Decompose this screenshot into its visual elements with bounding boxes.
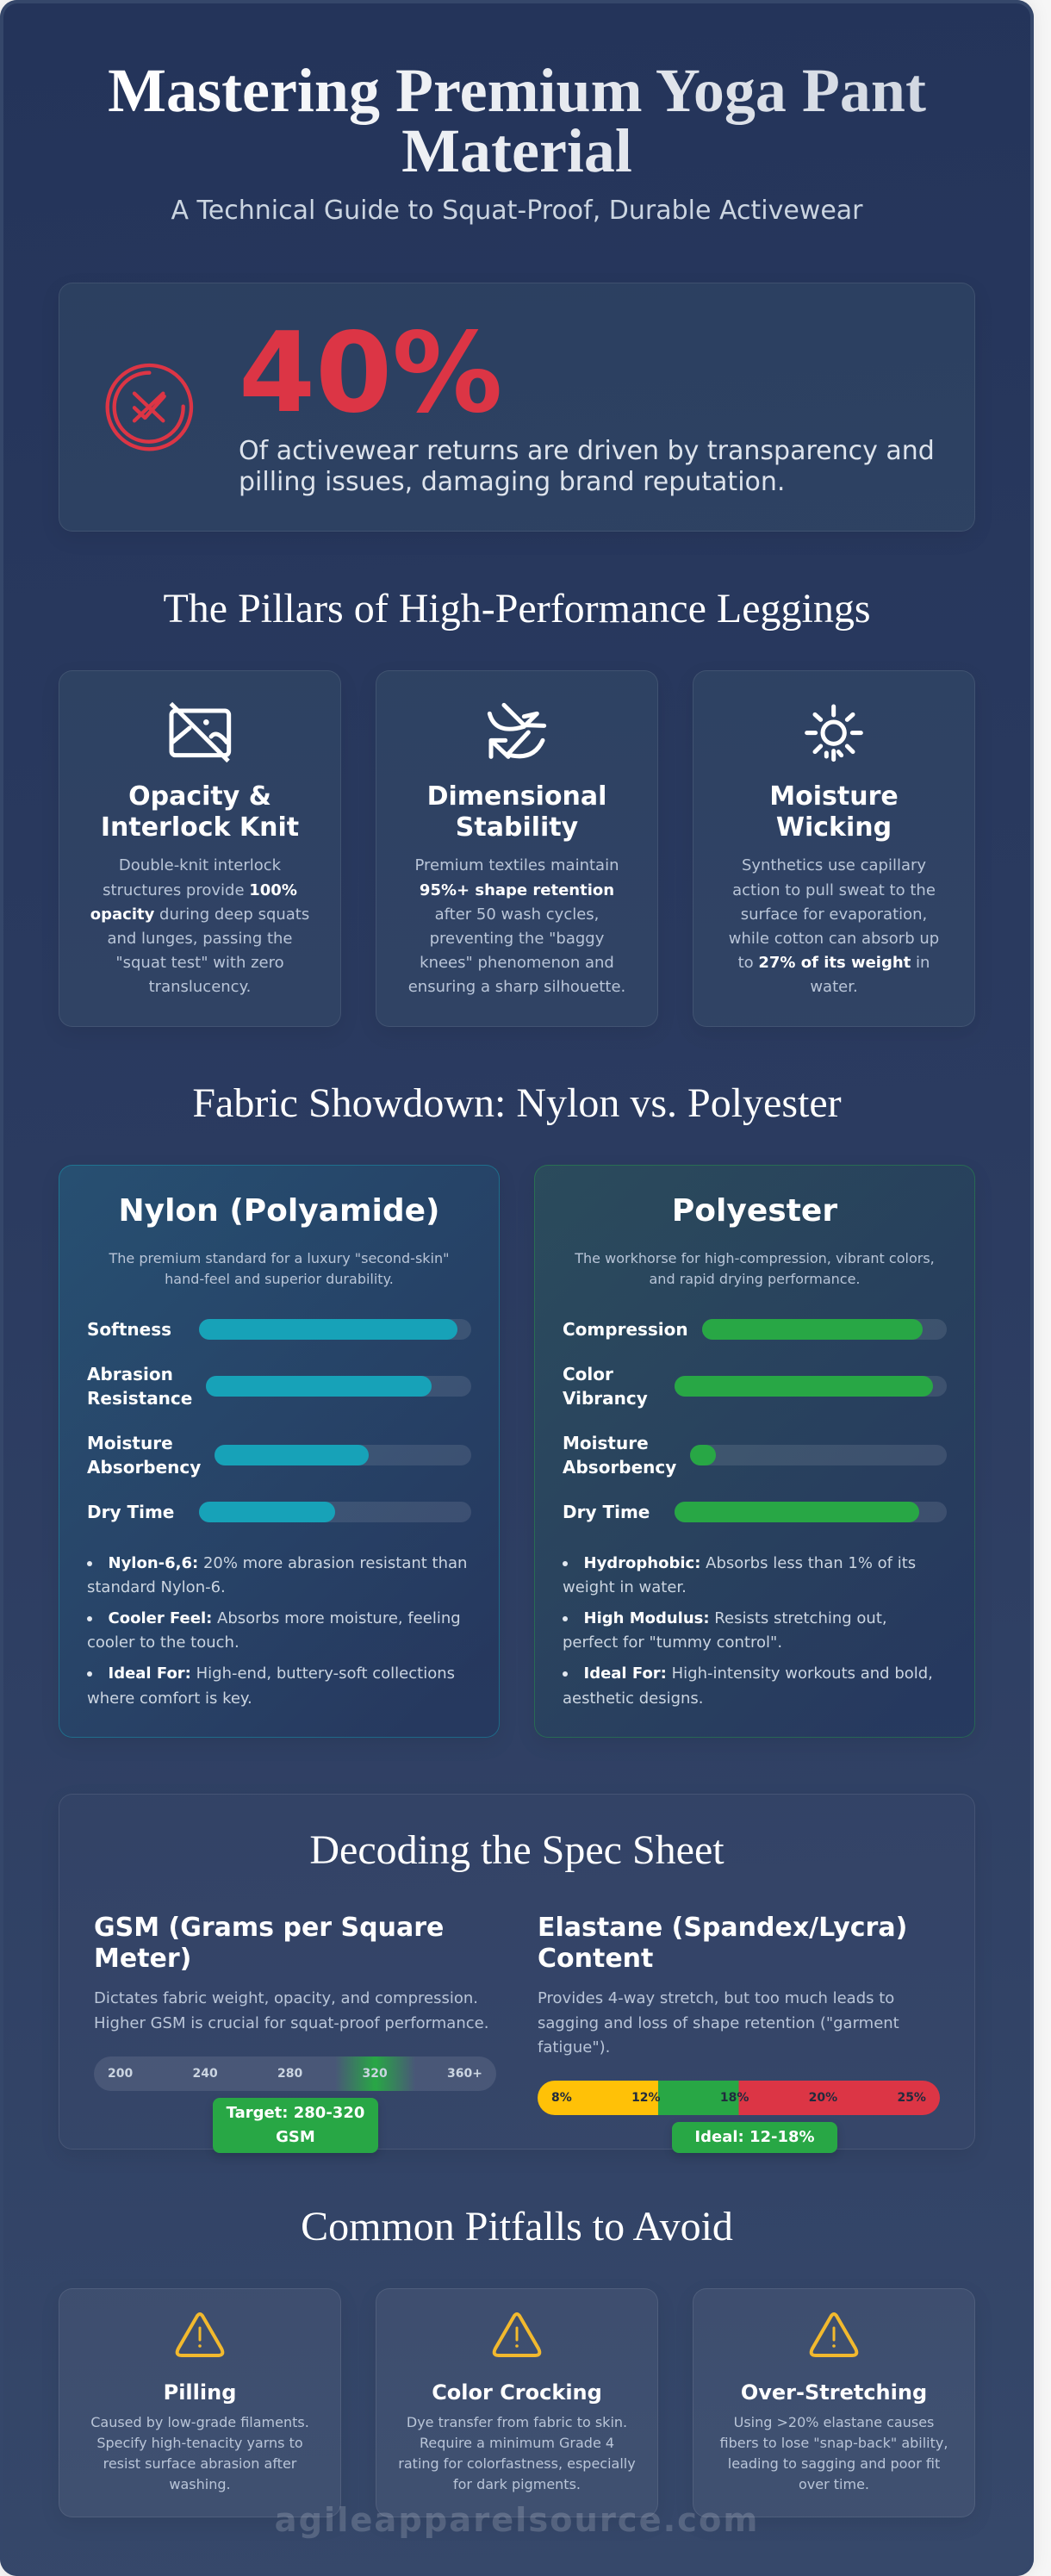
abrasion label: Abrasion <box>87 1364 173 1384</box>
heading: fabric showdown: Fabric Showdown: Nylon vs. Polyester <box>192 1080 842 1126</box>
pitfall text: over time. <box>799 2476 869 2492</box>
icon: red crossed circle <box>105 364 193 451</box>
panel: dimensional stability card <box>376 670 658 1027</box>
compression label: Compression <box>563 1319 688 1340</box>
compression bar <box>702 1319 947 1340</box>
pitfall title: Pilling <box>164 2380 236 2404</box>
panel: nylon <box>59 1165 500 1738</box>
pitfall text <box>398 2414 636 2492</box>
card title: Opacity & <box>128 781 271 812</box>
panel: 40% returns stat <box>59 283 975 532</box>
card text: preventing the "baggy <box>430 930 604 948</box>
gsm scale labels: 200 <box>108 2067 133 2081</box>
gsm scale <box>94 2056 496 2091</box>
polyester description: and rapid drying performance. <box>650 1271 860 1287</box>
heading: pitfalls: Common Pitfalls to Avoid <box>301 2204 733 2249</box>
elastane title <box>538 1913 907 1974</box>
elastane scale labels <box>551 2091 926 2105</box>
nylon bullet list: Nylon-6,6: 20% more abrasion resistant than <box>109 1554 467 1572</box>
card text: opacity during deep squats <box>90 905 309 924</box>
stat description: Of activewear returns are driven by transparency and <box>239 436 935 466</box>
elastane text <box>538 1989 899 2056</box>
pitfall text <box>720 2414 948 2492</box>
pitfall text: Specify high-tenacity yarns to <box>96 2435 303 2451</box>
elastane text: Provides 4-way stretch, but too much leads to <box>538 1989 894 2007</box>
stat description <box>239 436 935 497</box>
card title: Interlock Knit <box>101 812 299 843</box>
card text: structures provide 100% <box>103 881 297 899</box>
pitfall text: resist surface abrasion after <box>103 2455 296 2472</box>
polyester bullet list: perfect for "tummy control". <box>563 1633 782 1652</box>
abrasion label <box>87 1364 192 1409</box>
gsm target badge <box>213 2098 378 2153</box>
moisture label <box>87 1433 201 1478</box>
panel: moisture wicking card <box>693 670 975 1027</box>
card title <box>769 781 899 843</box>
color vibrancy bar <box>675 1376 947 1397</box>
moisture bar <box>690 1445 947 1465</box>
gsm text: Dictates fabric weight, opacity, and compression. <box>94 1989 478 2007</box>
elastane scale labels: 18% <box>720 2091 749 2105</box>
pitfall text: Require a minimum Grade 4 <box>420 2435 614 2451</box>
gsm target highlight <box>335 2056 415 2091</box>
nylon bullet list: cooler to the touch. <box>87 1633 239 1652</box>
polyester bullet list <box>563 1554 933 1708</box>
abrasion bar <box>206 1376 471 1397</box>
card text: action to pull sweat to the <box>732 881 936 899</box>
icon: image off <box>169 701 231 763</box>
gsm scale labels: 360+ <box>447 2067 482 2081</box>
nylon bullet list: where comfort is key. <box>87 1689 252 1708</box>
color vibrancy label: Color <box>563 1364 613 1384</box>
card title: Moisture <box>769 781 899 812</box>
spec heading: Decoding the Spec Sheet <box>309 1826 725 1873</box>
pitfall title: Over-Stretching <box>741 2380 927 2404</box>
nylon description: hand-feel and superior durability. <box>165 1271 394 1287</box>
card text: and lunges, passing the <box>107 930 293 948</box>
gsm title <box>94 1913 444 1974</box>
moisture label: Absorbency <box>563 1457 676 1478</box>
gsm text <box>94 1989 488 2032</box>
card text <box>90 856 309 996</box>
gsm scale labels: 240 <box>193 2067 218 2081</box>
abrasion label: Resistance <box>87 1388 192 1409</box>
nylon bullet list <box>87 1554 467 1708</box>
elastane ideal badge: Ideal: 12-18% <box>694 2128 815 2146</box>
icon: shape retention arrows <box>488 703 546 759</box>
elastane title: Elastane (Spandex/Lycra) <box>538 1913 907 1942</box>
gsm target badge: GSM <box>276 2128 315 2146</box>
pitfall text: Caused by low-grade filaments. <box>90 2414 309 2430</box>
polyester bullet list: aesthetic designs. <box>563 1689 704 1708</box>
card text: Synthetics use capillary <box>742 856 926 874</box>
card text: Double-knit interlock <box>119 856 281 874</box>
polyester bullet list: weight in water. <box>563 1578 687 1596</box>
pitfall text <box>90 2414 309 2492</box>
gsm scale labels: 280 <box>277 2067 302 2081</box>
elastane text: sagging and loss of shape retention ("garment <box>538 2014 899 2032</box>
polyester bullet list: High Modulus: Resists stretching out, <box>584 1609 887 1627</box>
elastane scale labels: 12% <box>631 2091 661 2105</box>
panel: opacity card <box>59 670 341 1027</box>
title <box>55 60 979 192</box>
title: Material <box>401 116 632 185</box>
nylon description <box>109 1250 450 1287</box>
nylon bullet list: standard Nylon-6. <box>87 1578 226 1596</box>
gsm scale labels <box>108 2067 482 2081</box>
panel: over-stretching pitfall <box>693 2288 975 2517</box>
pitfall text: Using >20% elastane causes <box>734 2414 934 2430</box>
softness bar <box>199 1319 471 1340</box>
card text: to 27% of its weight in <box>738 954 930 972</box>
polyester title: Polyester <box>672 1192 837 1229</box>
subtitle: A Technical Guide to Squat-Proof, Durable Activewear <box>171 196 863 226</box>
polyester bullet list: Hydrophobic: Absorbs less than 1% of its <box>584 1554 916 1572</box>
card title <box>101 781 299 843</box>
card text: while cotton can absorb up <box>729 930 939 948</box>
moisture bar <box>215 1445 471 1465</box>
icon: warning triangle <box>810 2312 858 2357</box>
dry time bar <box>675 1502 947 1522</box>
heading: pillars: The Pillars of High-Performance Leggings <box>163 586 871 632</box>
elastane scale <box>538 2081 940 2115</box>
softness label: Softness <box>87 1319 171 1340</box>
pitfall text: rating for colorfastness, especially <box>398 2455 636 2472</box>
card text: Premium textiles maintain <box>415 856 619 874</box>
pitfall text: leading to sagging and poor fit <box>728 2455 940 2472</box>
stat description: pilling issues, damaging brand reputation. <box>239 467 785 497</box>
moisture label <box>563 1433 676 1478</box>
dry time label: Dry Time <box>563 1502 650 1522</box>
gsm title: GSM (Grams per Square <box>94 1913 444 1942</box>
nylon description: The premium standard for a luxury "second-skin" <box>109 1250 450 1266</box>
pitfall title: Color Crocking <box>432 2380 602 2404</box>
pitfall text: for dark pigments. <box>453 2476 581 2492</box>
card text: after 50 wash cycles, <box>435 905 599 924</box>
dry time label: Dry Time <box>87 1502 174 1522</box>
pitfall text: fibers to lose "snap-back" ability, <box>720 2435 948 2451</box>
card text: water. <box>810 978 858 996</box>
card text: 95%+ shape retention <box>420 881 614 899</box>
icon: warning triangle <box>176 2312 224 2357</box>
panel: color crocking pitfall <box>376 2288 658 2517</box>
moisture label: Moisture <box>87 1433 173 1453</box>
elastane scale labels: 25% <box>897 2091 926 2105</box>
color vibrancy label: Vibrancy <box>563 1388 648 1409</box>
nylon title: Nylon (Polyamide) <box>119 1192 439 1229</box>
card text: "squat test" with zero <box>115 954 284 972</box>
nylon bullet list: Cooler Feel: Absorbs more moisture, feeling <box>109 1609 461 1627</box>
dry time bar <box>199 1502 471 1522</box>
card text <box>408 856 625 996</box>
icon: sun <box>805 705 863 762</box>
moisture label: Moisture <box>563 1433 649 1453</box>
elastane title: Content <box>538 1944 653 1974</box>
card text: surface for evaporation, <box>741 905 927 924</box>
icon: warning triangle <box>493 2312 541 2357</box>
card text: translucency. <box>149 978 251 996</box>
watermark: agileapparelsource.com <box>275 2501 759 2540</box>
card title: Dimensional <box>427 781 606 812</box>
elastane text: fatigue"). <box>538 2038 610 2056</box>
panel: polyester <box>534 1165 975 1738</box>
polyester description <box>575 1250 935 1287</box>
card title <box>427 781 606 843</box>
panel: pilling pitfall <box>59 2288 341 2517</box>
elastane scale labels: 20% <box>809 2091 837 2105</box>
nylon bullet list: Ideal For: High-end, buttery-soft collections <box>109 1664 455 1683</box>
card text: knees" phenomenon and <box>420 954 614 972</box>
gsm title: Meter) <box>94 1944 191 1974</box>
card title: Stability <box>456 812 578 843</box>
gsm text: Higher GSM is crucial for squat-proof performance. <box>94 2014 488 2032</box>
card text <box>729 856 939 996</box>
gsm scale labels: 320 <box>362 2067 388 2081</box>
pitfall text: washing. <box>169 2476 231 2492</box>
pitfall text: Dye transfer from fabric to skin. <box>407 2414 627 2430</box>
elastane ideal badge <box>672 2122 837 2153</box>
color vibrancy label <box>563 1364 648 1409</box>
moisture label: Absorbency <box>87 1457 201 1478</box>
title: Mastering Premium Yoga Pant <box>108 56 926 125</box>
polyester description: The workhorse for high-compression, vibrant colors, <box>575 1250 935 1266</box>
stat number: 40% <box>239 309 502 438</box>
panel: spec sheet <box>59 1794 975 2150</box>
elastane scale labels: 8% <box>551 2091 572 2105</box>
polyester bullet list: Ideal For: High-intensity workouts and bold, <box>584 1664 933 1683</box>
gsm target badge: Target: 280-320 <box>227 2104 364 2122</box>
card text: ensuring a sharp silhouette. <box>408 978 625 996</box>
card title: Wicking <box>776 812 892 843</box>
